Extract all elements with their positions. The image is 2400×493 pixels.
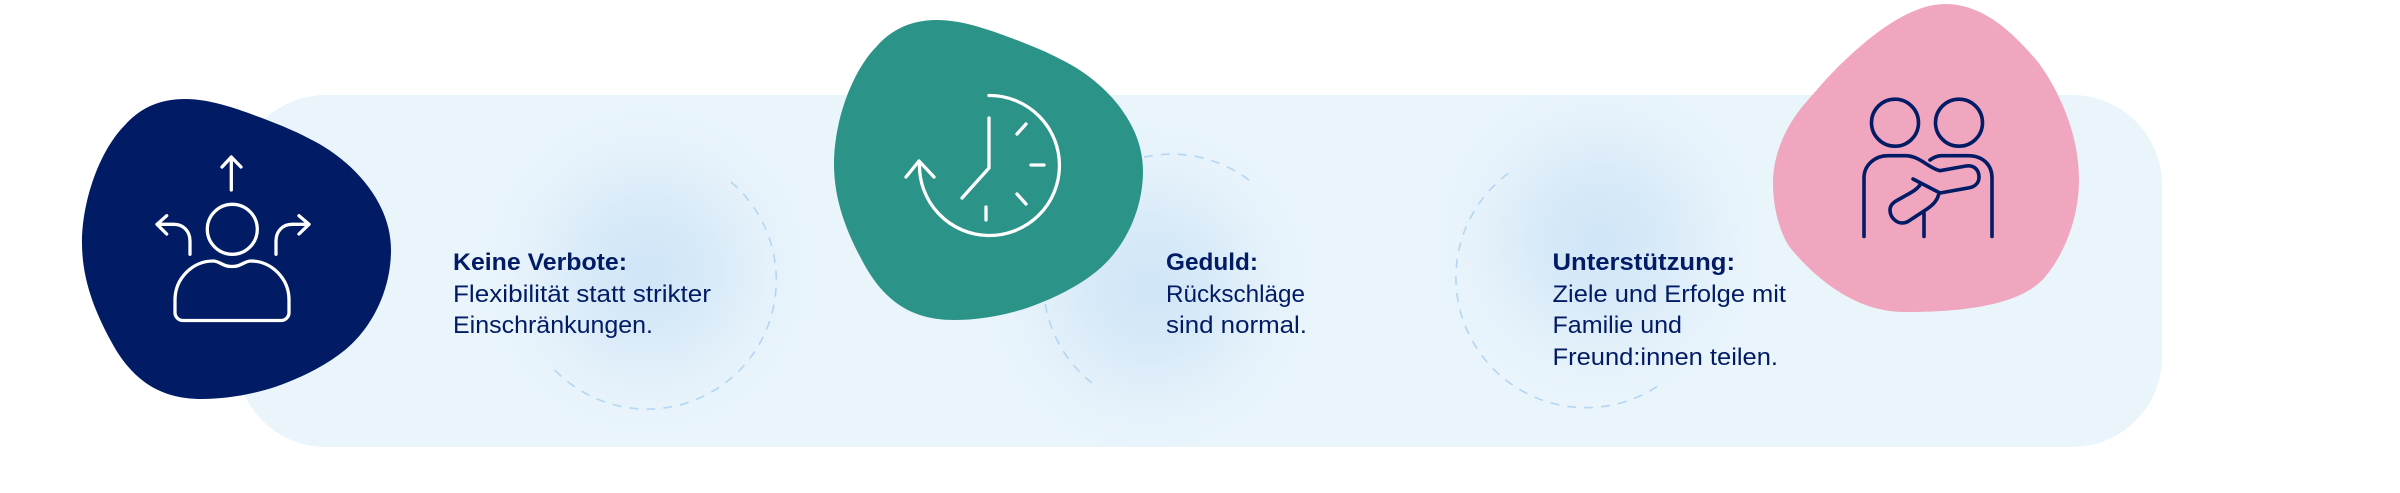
panel: background band — [236, 95, 2162, 447]
background glows — [545, 137, 1704, 392]
text block: Unterstützung: Familie und — [1552, 312, 1682, 339]
dashed ring 2 — [1043, 154, 1252, 383]
infographic — [82, 4, 2162, 447]
text block: Unterstützung: Unterstützung: — [1552, 249, 1735, 276]
icon: clock with return arrow — [906, 95, 1059, 235]
text block: Keine Verbote: Keine Verbote: — [453, 249, 627, 276]
text block: Unterstützung — [1552, 249, 1786, 371]
teal blob — [834, 20, 1143, 320]
dashed ring 3 — [1456, 169, 1657, 408]
icon: person with three arrows — [157, 157, 309, 321]
text block: Geduld: sind normal. — [1166, 312, 1307, 339]
text block: Unterstützung: Freund:innen teilen. — [1552, 344, 1778, 371]
text block: Keine Verbote — [453, 249, 711, 339]
text block: Keine Verbote: Einschränkungen. — [453, 312, 653, 339]
text block: Geduld: Geduld: — [1166, 249, 1258, 276]
navy blob — [82, 99, 391, 399]
icon: two people embracing — [1864, 99, 1992, 236]
dashed ring 1 — [551, 182, 776, 409]
text block: Geduld: Rückschläge — [1166, 281, 1305, 308]
pink blob — [1773, 4, 2079, 312]
text block: Unterstützung: Ziele und Erfolge mit — [1552, 281, 1786, 308]
text block: Geduld — [1166, 249, 1307, 339]
text block: Keine Verbote: Flexibilität statt strikter — [453, 281, 711, 308]
